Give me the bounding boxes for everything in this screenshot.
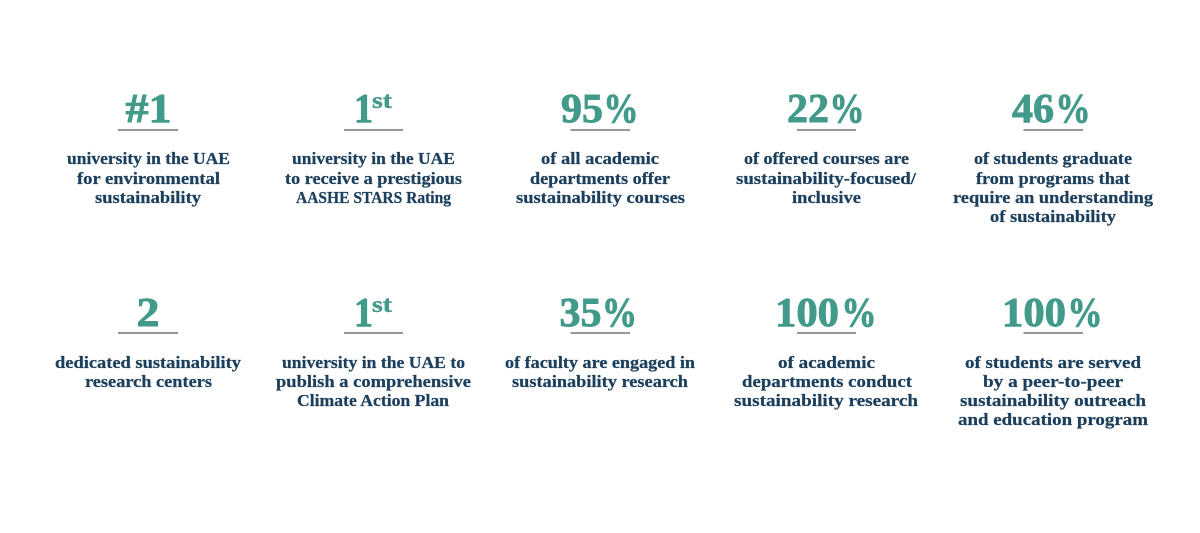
description: from programs that xyxy=(976,169,1131,188)
number: 100 xyxy=(775,289,839,335)
description xyxy=(734,353,918,410)
description: of students graduate xyxy=(974,149,1132,168)
rule xyxy=(118,129,178,131)
number: 1 xyxy=(354,85,373,131)
number: % xyxy=(604,85,638,131)
description: of students are served xyxy=(965,353,1141,372)
number xyxy=(354,289,392,335)
description: of offered courses are xyxy=(744,149,909,168)
number: 22 xyxy=(787,85,829,131)
number xyxy=(561,85,638,131)
description: to receive a prestigious xyxy=(285,169,463,188)
number: 2 xyxy=(136,289,160,335)
number: 1 xyxy=(354,289,373,335)
number xyxy=(1002,289,1102,335)
description xyxy=(67,149,230,207)
description: university in the UAE xyxy=(292,149,455,168)
description: inclusive xyxy=(792,188,861,207)
number: 95 xyxy=(561,85,603,131)
description xyxy=(285,149,463,207)
number xyxy=(354,85,392,131)
description: research centers xyxy=(85,372,213,391)
description xyxy=(516,149,686,207)
description: of academic xyxy=(778,353,875,372)
number: % xyxy=(842,289,876,335)
description xyxy=(55,353,242,391)
description: of faculty are engaged in xyxy=(505,353,695,372)
description xyxy=(505,353,695,391)
description: sustainability outreach xyxy=(960,391,1146,410)
number: 35 xyxy=(560,289,602,335)
rule xyxy=(344,129,403,131)
description: publish a comprehensive xyxy=(276,372,471,391)
description: sustainability-focused/ xyxy=(736,169,916,188)
description: for environmental xyxy=(77,169,220,188)
stat: 1st Climate Action Plan xyxy=(276,289,471,410)
description: university in the UAE xyxy=(67,149,230,168)
description xyxy=(953,149,1154,226)
stat: 95% departments xyxy=(516,85,686,207)
description: and education program xyxy=(958,410,1148,429)
rule xyxy=(1024,129,1083,131)
number: 46 xyxy=(1012,85,1054,131)
description: university in the UAE to xyxy=(282,353,465,372)
stat: 100% departments research xyxy=(734,289,918,410)
number: % xyxy=(602,289,637,335)
description: Climate Action Plan xyxy=(297,391,449,410)
description: of all academic xyxy=(541,149,659,168)
number: % xyxy=(830,85,864,131)
rule xyxy=(570,129,630,131)
number: st xyxy=(372,88,392,113)
number: % xyxy=(1056,85,1090,131)
description xyxy=(958,353,1148,429)
description xyxy=(276,353,471,410)
rule xyxy=(570,332,630,334)
description: sustainability research xyxy=(734,391,918,410)
number xyxy=(787,85,864,131)
rule xyxy=(1024,332,1083,334)
stat: 2 research centers xyxy=(55,289,242,391)
number xyxy=(1012,85,1090,131)
number: % xyxy=(1068,289,1102,335)
stat: #1 university xyxy=(67,85,230,207)
description: sustainability courses xyxy=(516,188,686,207)
description: dedicated sustainability xyxy=(55,353,242,372)
description: by a peer-to-peer xyxy=(983,372,1123,391)
number xyxy=(775,289,876,335)
number xyxy=(560,289,637,335)
description: departments offer xyxy=(530,169,670,188)
rule xyxy=(797,332,856,334)
description xyxy=(736,149,916,207)
rule xyxy=(118,332,178,334)
stat: 100% students served xyxy=(958,289,1148,429)
rule xyxy=(797,129,856,131)
description: of sustainability xyxy=(990,207,1117,226)
stat: 22% courses xyxy=(736,85,916,207)
number: st xyxy=(372,292,392,317)
stat: 1st AASHE STARS xyxy=(285,85,463,207)
stat: 46% students xyxy=(953,85,1154,226)
description: AASHE STARS Rating xyxy=(296,188,452,207)
number: 100 xyxy=(1002,289,1066,335)
stat: 35% faculty xyxy=(505,289,695,391)
description: sustainability research xyxy=(512,372,688,391)
description: departments conduct xyxy=(742,372,913,391)
number: #1 xyxy=(126,85,172,131)
description: require an understanding xyxy=(953,188,1154,207)
description: sustainability xyxy=(95,188,202,207)
rule xyxy=(344,332,403,334)
